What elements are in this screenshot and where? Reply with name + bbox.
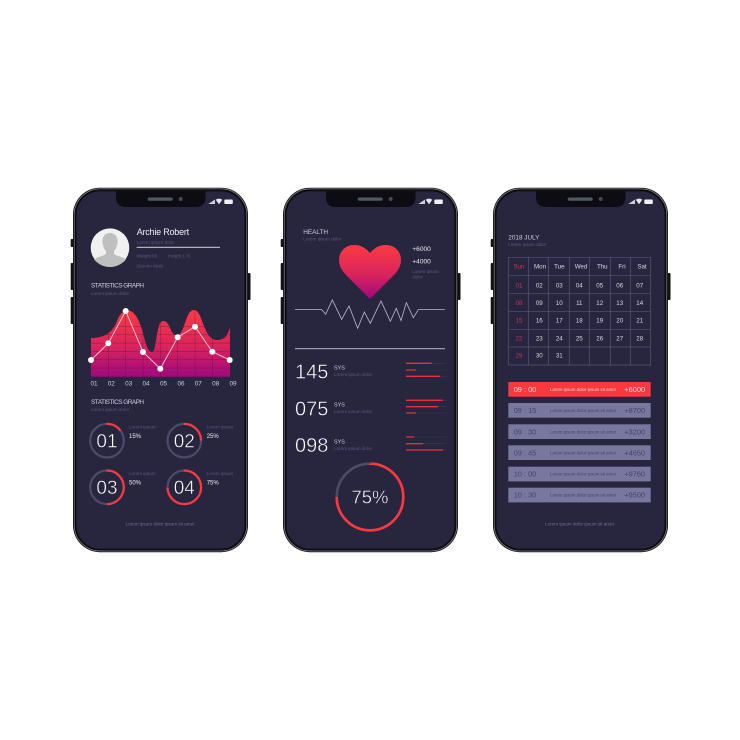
profile text: Lorem ipsum dolor [137,240,175,245]
reading 075 [295,398,447,420]
reading 098: Lorem ipsum dolor [334,446,373,451]
calendar: 16 [536,318,543,325]
heart values: +4000 [412,259,431,266]
ring 02 [168,424,233,458]
schedule row 09:30: +3200 [624,427,645,436]
chart x axis labels: 02 [108,380,115,388]
ecg line [295,300,445,328]
area chart [88,305,233,377]
schedule row 09:30 [508,424,651,439]
ring 02: 25% [207,434,219,440]
divider [295,348,445,349]
schedule row 10:30: Lorem ipsum dolor ipsum sit amet [550,493,617,498]
reading 145 [295,361,447,383]
calendar: 19 [596,318,604,325]
schedule row 09:30: 09 : 30 [514,427,536,436]
ring 01: Lorem ipsum [129,424,156,430]
heart values: +6000 [412,246,431,253]
calendar: 22 [516,335,523,342]
calendar: 17 [556,318,563,325]
phone frame [71,188,250,552]
reading 075: SYS [334,402,345,408]
heading: health: Lorem ipsum dolor [303,236,342,242]
profile text: Gender Male [137,264,164,268]
heading: statistics graph 2: STATISTICS GRAPH [91,399,144,406]
calendar: Thu [597,263,608,270]
schedule row 10:00: 10 : 00 [514,470,536,479]
calendar: Tue [554,263,565,270]
heading: 2018 july: 2018 JULY [508,234,540,242]
calendar: 31 [556,352,563,359]
reading 098: SYS [334,440,345,446]
chart x axis labels: 04 [142,380,150,388]
chart x axis labels: 09 [229,380,237,388]
schedule row 09:45: Lorem ipsum dolor ipsum sit amet [550,450,617,455]
reading 098: 098 [295,435,328,457]
heading: 2018 july: Lorem ipsum dolor [508,242,547,247]
chart x axis labels: 08 [212,380,220,388]
calendar: 29 [516,352,523,359]
phone frame [281,188,460,552]
ring 02: 02 [174,432,195,452]
calendar: Sun [513,263,525,270]
footer text: Lorem ipsum dolor ipsum sit amet [126,522,195,526]
calendar: 25 [576,335,583,342]
schedule row 10:30: +9500 [624,491,645,500]
profile text: Weight 60 [137,254,158,258]
heart values: dolor [412,274,423,280]
ring 03: Lorem ipsum [129,471,156,476]
schedule row 09:15 [508,403,651,418]
profile text: Height 178 [168,254,191,258]
heading: statistics graph: Lorem ipsum dolor [91,291,130,296]
calendar: Fri [618,263,626,270]
schedule row 10:00: Lorem ipsum dolor ipsum sit amet [550,472,617,477]
schedule row 09:15: 09 : 15 [514,406,536,415]
heart icon [339,245,401,299]
ring 01: 01 [96,432,118,452]
calendar: 08 [516,300,523,307]
phone 3: calendar screen [491,188,670,552]
schedule row 09:15: Lorem ipsum dolor ipsum sit amet [550,408,617,413]
calendar: 23 [536,335,543,342]
profile text [137,227,220,268]
ring 02: Lorem ipsum [207,424,233,430]
chart x axis labels [90,380,237,388]
calendar: 18 [576,318,583,325]
schedule row 09:45 [508,445,651,460]
schedule row 10:30 [508,488,651,502]
phone 2: health screen [281,188,460,552]
chart x axis labels: 03 [125,380,133,388]
heading: statistics graph [91,282,144,296]
calendar: Sat [637,263,647,270]
phone 1: profile screen [71,188,250,552]
schedule row 09:00: 09 : 00 [514,385,536,394]
calendar: 05 [596,283,604,290]
calendar: 24 [556,335,563,342]
calendar: 03 [556,283,563,290]
calendar: 09 [536,300,543,307]
calendar: 11 [576,300,583,307]
reading 075: 075 [295,398,328,420]
calendar: 21 [636,318,644,325]
heading: statistics graph 2 [91,399,144,412]
heart values: Lorem ipsum [412,269,439,274]
calendar: 04 [576,283,583,290]
calendar: 10 [556,300,563,307]
calendar: 30 [536,352,543,359]
heading: health: HEALTH [303,229,328,236]
schedule row 10:00 [508,467,651,481]
heading: statistics graph: STATISTICS GRAPH [91,282,144,290]
ring 04: 04 [174,478,195,499]
avatar [91,228,129,267]
chart x axis labels: 07 [195,380,202,388]
ring 04: Lorem ipsum [207,471,233,476]
heading: 2018 july [508,234,547,247]
ring 01: 15% [129,434,142,440]
schedule row 09:15: +8700 [624,406,645,415]
reading 145: Lorem ipsum dolor [334,372,373,377]
chart x axis labels: 01 [90,380,98,388]
schedule row 09:45: +4650 [624,448,645,457]
schedule row 10:30: 10 : 30 [514,491,536,500]
chart x axis labels: 06 [177,380,185,388]
progress ring 75%: 75% [351,486,389,507]
heading: health [303,229,342,242]
phone frame [491,188,670,552]
calendar [508,257,651,365]
calendar: 01 [516,283,523,290]
calendar: 26 [596,335,604,342]
reading 075: Lorem ipsum dolor [334,409,373,414]
calendar: 02 [536,283,543,290]
chart x axis labels: 05 [160,380,167,388]
schedule row 09:00: Lorem ipsum dolor ipsum sit amet [550,387,617,392]
ring 04: 75% [207,480,219,486]
reading 145: SYS [334,366,345,372]
calendar: 07 [636,283,644,290]
calendar: 06 [616,283,624,290]
ring 01 [90,424,156,458]
calendar: Mon [534,263,547,270]
schedule row 09:45: 09 : 45 [514,448,536,457]
schedule row 09:00 [508,382,651,397]
heart values [412,246,439,280]
calendar: 20 [616,318,624,325]
calendar: 12 [596,300,604,307]
calendar: 14 [636,300,644,307]
schedule row 09:00: +6000 [624,385,645,394]
calendar: 28 [636,335,644,342]
reading 098 [295,435,447,457]
ring 03: 50% [129,480,142,486]
ring 03: 03 [96,478,118,499]
footer text: Lorem ipsum dolor ipsum sit amet [545,522,615,526]
calendar: 27 [616,335,624,342]
calendar: 15 [516,318,523,325]
calendar: 13 [616,300,624,307]
heading: statistics graph 2: Lorem ipsum dolor [91,407,130,412]
progress ring 75% [337,464,403,530]
profile text: Archie Robert [137,227,190,237]
reading 145: 145 [295,361,328,383]
ring 03 [90,470,156,504]
schedule row 09:30: Lorem ipsum dolor ipsum sit amet [550,429,617,434]
calendar: Wed [575,263,588,270]
schedule row 10:00: +9760 [624,470,645,479]
ring 04 [168,470,233,504]
